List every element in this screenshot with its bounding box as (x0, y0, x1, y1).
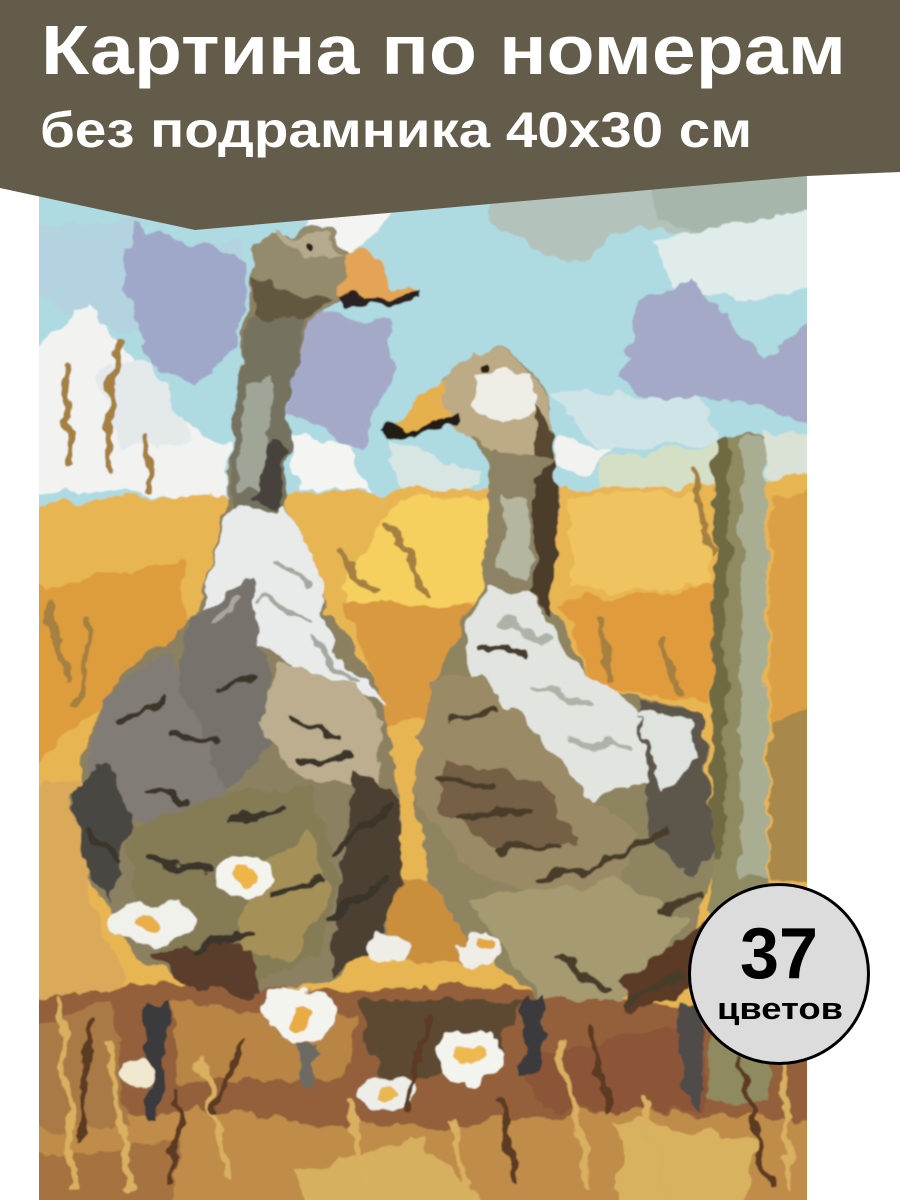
goose legs (145, 995, 705, 1120)
grass foreground (20, 985, 830, 1200)
title: Картина по номерам (41, 11, 846, 89)
feather marks (440, 650, 700, 1000)
breast (465, 590, 650, 800)
painting (20, 160, 830, 1200)
neck (230, 315, 305, 520)
head (380, 346, 556, 460)
neck (480, 448, 556, 584)
feather marks (90, 680, 390, 950)
head (248, 224, 418, 322)
badge label: цветов (717, 991, 843, 1026)
color count badge (690, 884, 868, 1064)
wheat field (20, 475, 830, 1040)
daisies (109, 855, 504, 1108)
number of colors: 37 (740, 914, 818, 994)
left goose (72, 224, 418, 998)
subtitle: без подрамника 40х30 см (40, 102, 752, 158)
breast (205, 505, 385, 700)
grass strokes (50, 340, 790, 1195)
header banner (0, 0, 900, 230)
fence post (708, 435, 768, 1100)
right goose (376, 350, 715, 1010)
sky (39, 176, 807, 508)
